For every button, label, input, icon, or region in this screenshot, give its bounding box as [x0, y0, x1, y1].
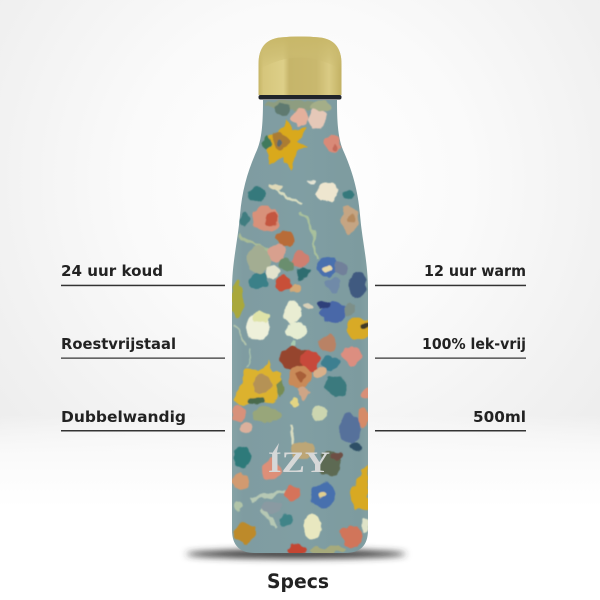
top foliage — [265, 100, 325, 110]
bottle shadow — [186, 550, 406, 558]
caption: Specs: Specs — [267, 570, 329, 593]
white flowers — [283, 301, 301, 323]
spec: 12 uur warm: 12 uur warm — [424, 262, 526, 280]
spec: 500ml: 500ml — [473, 408, 526, 426]
flower cluster lower — [319, 334, 337, 352]
lower band flowers — [232, 404, 246, 422]
brand logo: IZY — [268, 446, 330, 479]
bottle — [225, 36, 375, 556]
blue irises — [317, 258, 339, 276]
spec: Roestvrijstaal: Roestvrijstaal — [61, 335, 176, 353]
bottle body with floral pattern — [232, 100, 368, 553]
spec: Dubbelwandig: Dubbelwandig — [61, 408, 186, 426]
flower cluster upper — [253, 206, 279, 232]
black ring — [258, 95, 342, 100]
gold cap — [258, 36, 342, 95]
yellow left edge — [231, 282, 243, 318]
spec: 100% lek-vrij: 100% lek-vrij — [422, 335, 526, 353]
sunflower lower — [234, 358, 285, 405]
background floor — [0, 415, 600, 600]
sunflower right — [348, 317, 370, 339]
sunflower top — [264, 117, 307, 170]
spec: 24 uur koud: 24 uur koud — [61, 262, 163, 280]
